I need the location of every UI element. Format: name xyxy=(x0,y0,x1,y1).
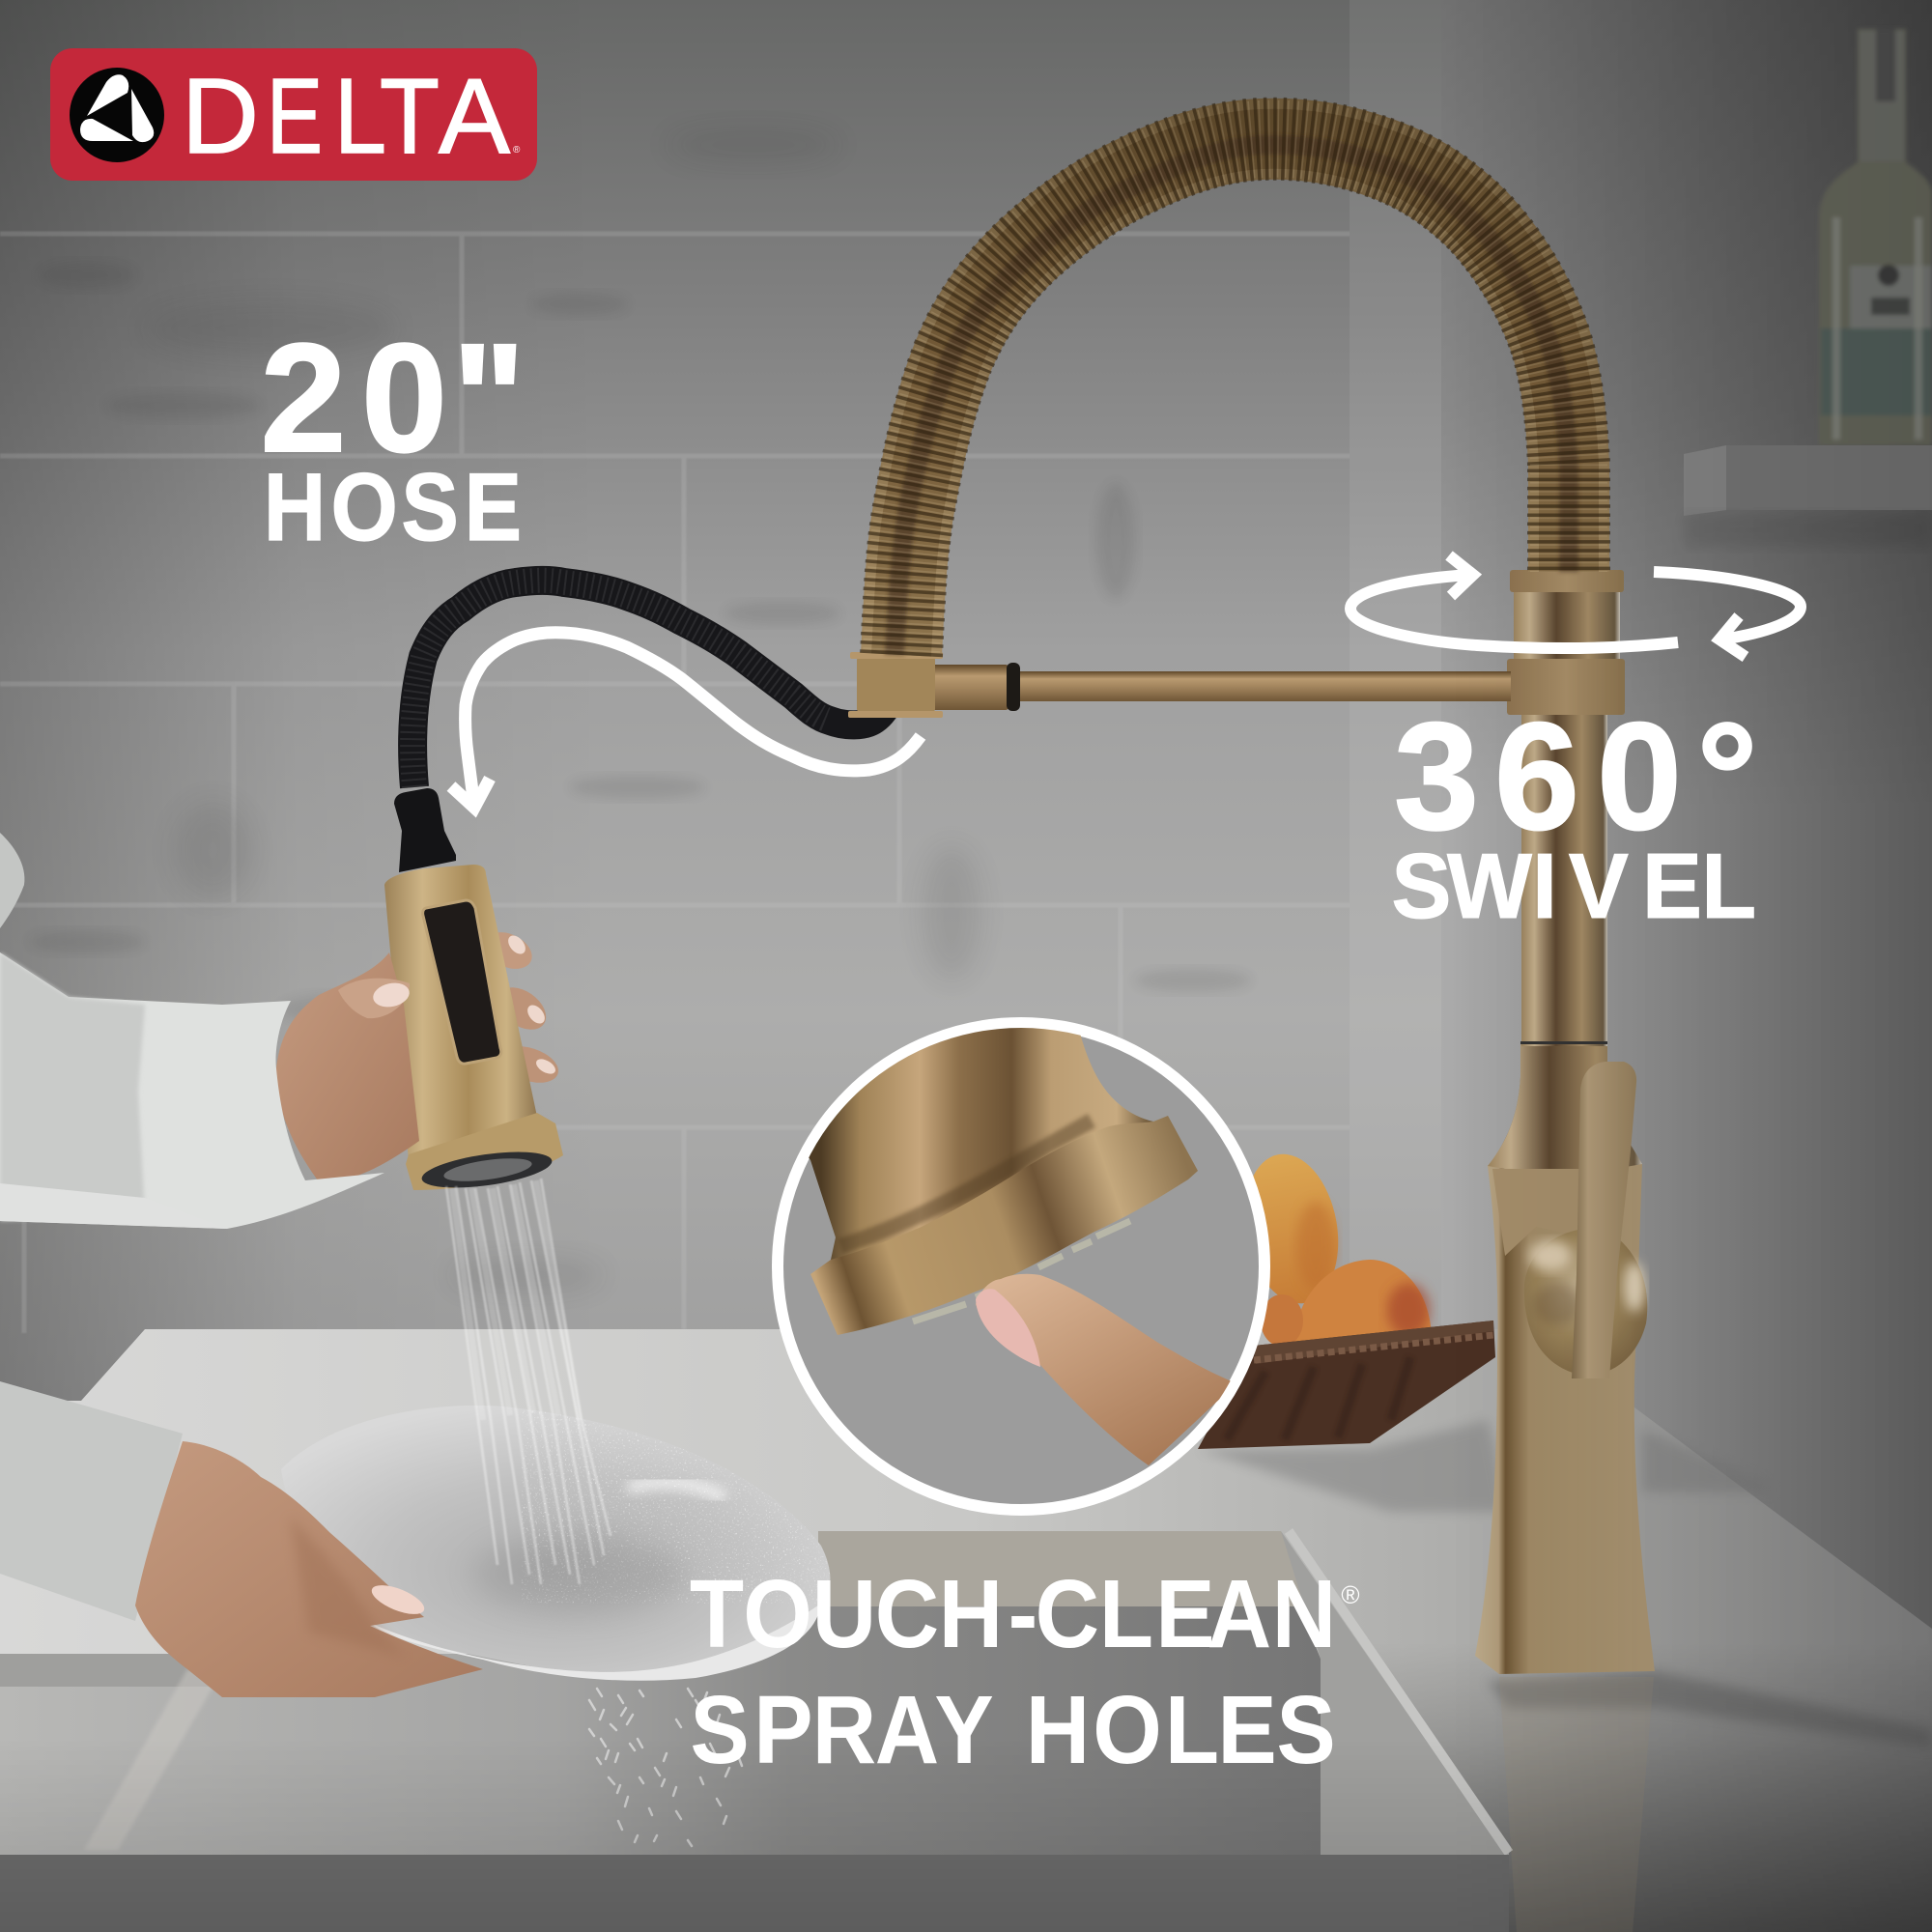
icon: delta triangle mark xyxy=(70,68,164,162)
back fingers of upper hand xyxy=(478,925,563,1090)
base xyxy=(1475,1043,1655,1674)
logo wordmark: A xyxy=(439,57,511,176)
inset circle: touch-clean spray head xyxy=(772,1017,1270,1516)
sink right wall xyxy=(1281,1531,1509,1860)
wall corner panel and right wall xyxy=(1350,0,1932,1642)
logo wordmark: D xyxy=(182,57,259,176)
callout: touch-clean spray holes: TOUCH-CLEAN xyxy=(690,1560,1336,1668)
logo wordmark: T xyxy=(380,57,440,176)
water spray xyxy=(446,1179,611,1584)
spray face xyxy=(419,1146,554,1194)
coiled spring spout xyxy=(895,139,1569,655)
braided black hose xyxy=(412,581,891,787)
shelf xyxy=(1684,445,1932,516)
nail xyxy=(368,1579,428,1620)
thumb nail xyxy=(371,980,412,1010)
nail xyxy=(976,1289,1040,1367)
water splash below plate xyxy=(589,1689,742,1846)
shadow above flange xyxy=(840,1121,1092,1246)
handle xyxy=(1572,1062,1636,1378)
sink back wall xyxy=(818,1531,1321,1606)
upper sleeve xyxy=(0,833,384,1229)
basket xyxy=(1198,1321,1495,1449)
knob xyxy=(1524,1229,1647,1376)
logo wordmark: E xyxy=(267,57,323,176)
counter darkening toward front right xyxy=(1365,1642,1932,1932)
pull-down sprayer head xyxy=(384,788,563,1194)
faucet body xyxy=(1475,1043,1655,1932)
button panel xyxy=(423,900,501,1064)
peach: small xyxy=(1261,1294,1303,1347)
fruit basket with peaches xyxy=(1198,1147,1495,1449)
callout: 20 inch hose: 20" xyxy=(261,311,526,484)
spray head bell xyxy=(809,1028,1153,1260)
background: marble tile wall xyxy=(0,0,1352,1449)
registered mark: ® xyxy=(513,145,521,156)
shelf with bottle xyxy=(1684,29,1932,547)
countertop and sink xyxy=(0,1329,1932,1932)
logo wordmark xyxy=(182,57,511,176)
callout: touch-clean spray holes: SPRAY HOLES xyxy=(690,1676,1336,1784)
flange xyxy=(406,1113,563,1190)
plate xyxy=(281,1406,840,1681)
callout: 20 inch hose: HOSE xyxy=(264,454,522,560)
horizontal arm and coupling xyxy=(848,652,1511,718)
callout: touch-clean spray holes xyxy=(690,1560,1360,1784)
peach: right xyxy=(1294,1260,1432,1343)
lower hand holding plate xyxy=(135,1441,483,1697)
swivel rotation arrows xyxy=(1350,555,1801,657)
callout: 360 degree swivel xyxy=(1391,692,1758,938)
logo: Delta xyxy=(50,48,537,181)
palm xyxy=(276,952,419,1184)
bottle xyxy=(1819,29,1932,445)
callout: 360 degree swivel: SWIVEL xyxy=(1391,835,1756,938)
faucet column and collars xyxy=(1507,570,1625,1046)
marble veining xyxy=(29,128,1251,1293)
rubber spray nubs xyxy=(913,1221,1130,1321)
upper hand holding sprayer xyxy=(276,952,419,1184)
peach: top xyxy=(1234,1147,1350,1311)
shadows on counter xyxy=(1198,1420,1932,1748)
hose arrow xyxy=(451,633,921,808)
callout: touch-clean spray holes: ® xyxy=(1341,1580,1360,1609)
lower sleeve xyxy=(0,1381,183,1621)
callout: 20 inch hose xyxy=(261,311,526,560)
sink interior xyxy=(0,1606,1321,1860)
connector xyxy=(394,788,456,872)
logo wordmark: L xyxy=(334,57,386,176)
neck xyxy=(1488,1043,1642,1171)
reflection xyxy=(1499,1677,1654,1932)
callout: 360 degree swivel: 360° xyxy=(1394,692,1758,862)
finger xyxy=(976,1274,1236,1465)
sprayer body xyxy=(384,865,537,1161)
spray head flange xyxy=(810,1116,1198,1335)
